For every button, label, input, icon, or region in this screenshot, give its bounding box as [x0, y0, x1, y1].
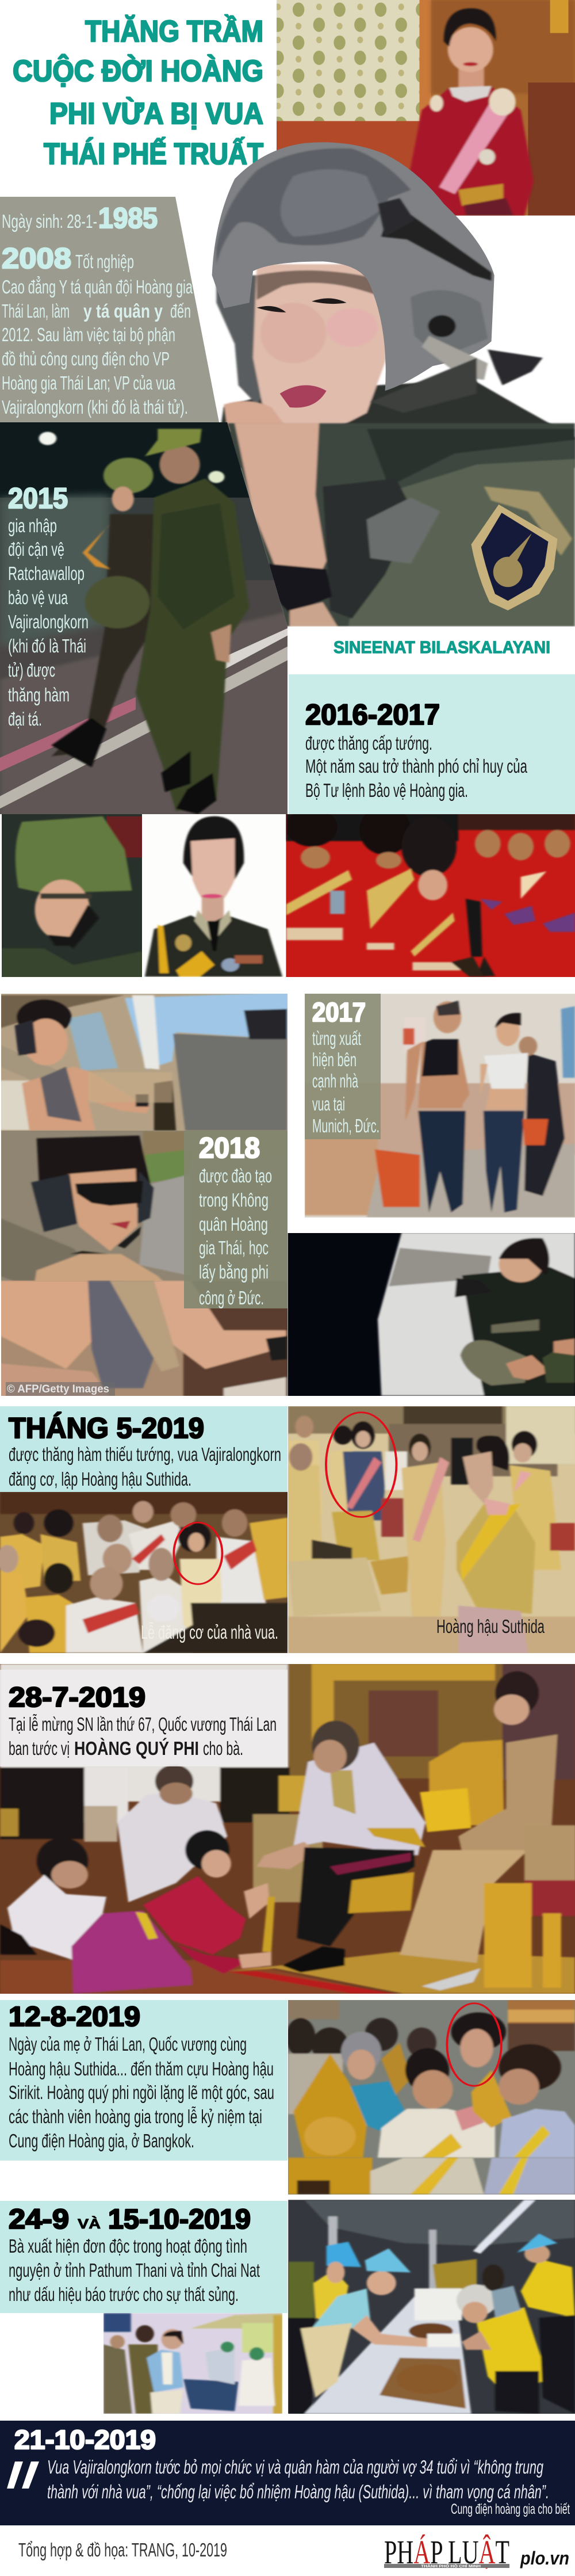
panel: 2017: hiện bên — [312, 1049, 356, 1070]
icon: quotation marks — [7, 2461, 39, 2489]
title: PHI VỪA BỊ VUA — [49, 97, 263, 131]
panel: 12-8-2019 — [0, 2000, 288, 2161]
panel: 24-9 and 15-10-2019: như dấu hiệu báo trước cho sự thất sủng. — [9, 2284, 239, 2305]
panel: 28-7-2019: ban tước vị — [9, 1738, 70, 1759]
text: 2015: đội cận vệ — [8, 539, 64, 560]
panel: birth and 2008: 2012. Sau làm việc tại bộ phận — [2, 324, 175, 345]
name caption: SINEENAT BILASKALAYANI — [334, 638, 550, 657]
panel: 2016-2017: 2016-2017 — [305, 699, 440, 731]
panel: 12-8-2019: Sirikit. Hoàng quý phi ngồi lặng lẽ một góc, sau — [9, 2082, 274, 2103]
photo: pilot in cockpit — [0, 993, 290, 1131]
panel: 2018 — [184, 1131, 288, 1308]
text: 2015: thăng hàm — [8, 684, 70, 705]
panel: birth and 2008: 1985 — [98, 202, 158, 234]
text: 2015: Ratchawallop — [8, 563, 85, 584]
panel: birth and 2008: đến — [170, 300, 191, 322]
panel: 2016-2017: được thăng cấp tướng. — [305, 732, 432, 754]
panel: 2018: trong Không — [199, 1189, 269, 1211]
panel: birth and 2008: Vajiralongkorn (khi đó là thái tử). — [2, 396, 188, 418]
footer credit: Tổng hợp & đồ họa: TRANG, 10-2019 — [18, 2539, 227, 2560]
panel: birth and 2008: Tốt nghiệp — [75, 251, 134, 272]
panel: 21-10-2019: 21-10-2019 — [14, 2425, 156, 2455]
panel: 21-10-2019 — [0, 2421, 575, 2525]
panel: May 2019: THÁNG 5-2019 — [9, 1412, 204, 1444]
panel: 2018: được đào tạo — [199, 1165, 272, 1186]
panel: 28-7-2019 — [0, 1670, 288, 1766]
photo: red dress portrait — [277, 0, 575, 216]
panel: birth and 2008: Hoàng gia Thái Lan; VP của vua — [2, 372, 175, 394]
panel: 2018: quân Hoàng — [199, 1213, 268, 1235]
panel: 2016-2017 — [289, 674, 575, 814]
panel: 12-8-2019: 12-8-2019 — [9, 2002, 140, 2032]
title: THÁI PHẾ TRUẤT — [44, 137, 263, 171]
text: 2015 — [8, 482, 89, 730]
title: THĂNG TRẦM — [85, 14, 263, 48]
panel: birth and 2008: đồ thủ công cung điện cho VP — [2, 348, 170, 369]
photo: soldier closeup — [0, 814, 147, 979]
text: 2015: 2015 — [8, 482, 68, 514]
panel: 12-8-2019: Ngày của mẹ ở Thái Lan, Quốc vương cùng — [9, 2033, 247, 2055]
panel: birth and 2008 — [0, 197, 219, 422]
panel: birth and 2008: y tá quân y — [83, 300, 163, 322]
panel: 28-7-2019: cho bà. — [203, 1738, 243, 1759]
photo: pilot with sunglasses — [0, 1131, 293, 1406]
panel: 12-8-2019: Cung điện Hoàng gia, ở Bangkok. — [9, 2130, 194, 2151]
text: 2015: bảo vệ vua — [8, 587, 68, 608]
photo: Queen Suthida ceremony — [288, 1406, 575, 1654]
caption: coronation: Lễ đăng cơ của nhà vua. — [141, 1621, 278, 1643]
logo: Pháp Luật: plo.vn — [520, 2548, 569, 2569]
panel: 2017 — [305, 994, 381, 1139]
panel: 12-8-2019: Hoàng hậu Suthida... đến thăm cựu Hoàng hậu — [9, 2058, 274, 2079]
text: 2015: tử) được — [8, 659, 55, 681]
photo: Munich shopping — [304, 994, 575, 1218]
text: 2015: đại tá. — [8, 708, 42, 730]
title — [13, 14, 263, 171]
logo: Pháp Luật: PHÁP LUẬT — [384, 2533, 509, 2571]
panel: May 2019 — [0, 1406, 288, 1492]
panel: 28-7-2019: Tại lễ mừng SN lần thứ 67, Quốc vương Thái Lan — [9, 1713, 277, 1735]
credit: AFP: © AFP/Getty Images — [7, 1383, 109, 1395]
panel: 2018: lấy bằng phi — [199, 1261, 269, 1283]
name caption — [288, 627, 575, 674]
photo: coronation crowd — [0, 1492, 290, 1654]
panel: 2016-2017: Bộ Tư lệnh Bảo vệ Hoàng gia. — [305, 780, 468, 801]
panel: 2017: từng xuất — [312, 1028, 361, 1049]
photo: Mother's Day ceremony — [286, 2000, 575, 2198]
title: CUỘC ĐỜI HOÀNG — [13, 54, 263, 88]
panel: 24-9 and 15-10-2019: 24-9 — [9, 2204, 69, 2235]
photo: hospital visit — [103, 2313, 283, 2414]
panel: 24-9 and 15-10-2019: nguyện ở tỉnh Pathum Thani và tỉnh Chai Nat — [9, 2260, 260, 2281]
panel: 2017: 2017 — [312, 997, 366, 1027]
text: 2015: (khi đó là Thái — [8, 635, 86, 657]
photo: food distribution — [288, 2200, 575, 2414]
photo: 2015 with the king — [0, 418, 293, 817]
photo: consort title ceremony — [0, 1663, 575, 1994]
panel: May 2019: được thăng hàm thiếu tướng, vua Vajiralongkorn — [9, 1444, 281, 1465]
panel: 28-7-2019: 28-7-2019 — [9, 1682, 145, 1713]
panel: 24-9 and 15-10-2019 — [0, 2201, 288, 2313]
panel: 2018: gia Thái, học — [199, 1237, 269, 1258]
panel: 24-9 and 15-10-2019: Bà xuất hiện đơn độc trong hoạt động tình — [9, 2235, 247, 2257]
panel: 2017: vua tại — [312, 1093, 345, 1115]
panel: 2018: công ở Đức. — [199, 1287, 264, 1308]
logo: Pháp Luật: THÀNH PHỐ HỒ CHÍ MINH — [421, 2564, 481, 2569]
photo: royal guards in red — [286, 806, 575, 979]
photo: official portrait — [143, 814, 290, 979]
photo: parachute at plane door — [288, 1232, 575, 1398]
panel: 12-8-2019: các thành viên hoàng gia trong lễ kỷ niệm tại — [9, 2106, 262, 2127]
panel: 28-7-2019: HOÀNG QUÝ PHI — [74, 1738, 199, 1759]
panel: 2017: cạnh nhà — [312, 1070, 358, 1092]
panel: 24-9 and 15-10-2019: 15-10-2019 — [108, 2204, 251, 2235]
panel: birth and 2008: Thái Lan, làm — [2, 300, 70, 322]
panel: 2018: 2018 — [199, 1132, 260, 1164]
photo: pilot in helmet — [212, 142, 575, 627]
text: 2015: Vajiralongkorn — [8, 611, 89, 632]
panel: birth and 2008: Cao đẳng Y tá quân đội Hoàng gia — [2, 276, 193, 297]
panel: birth and 2008: Ngày sinh: 28-1- — [2, 211, 97, 232]
text: 2015: gia nhập — [8, 515, 57, 536]
panel: birth and 2008: 2008 — [2, 242, 71, 274]
panel: 24-9 and 15-10-2019: VÀ — [78, 2216, 101, 2232]
panel: 2017: Munich, Đức. — [312, 1115, 379, 1136]
panel: May 2019: đăng cơ, lập Hoàng hậu Suthida. — [9, 1468, 191, 1490]
